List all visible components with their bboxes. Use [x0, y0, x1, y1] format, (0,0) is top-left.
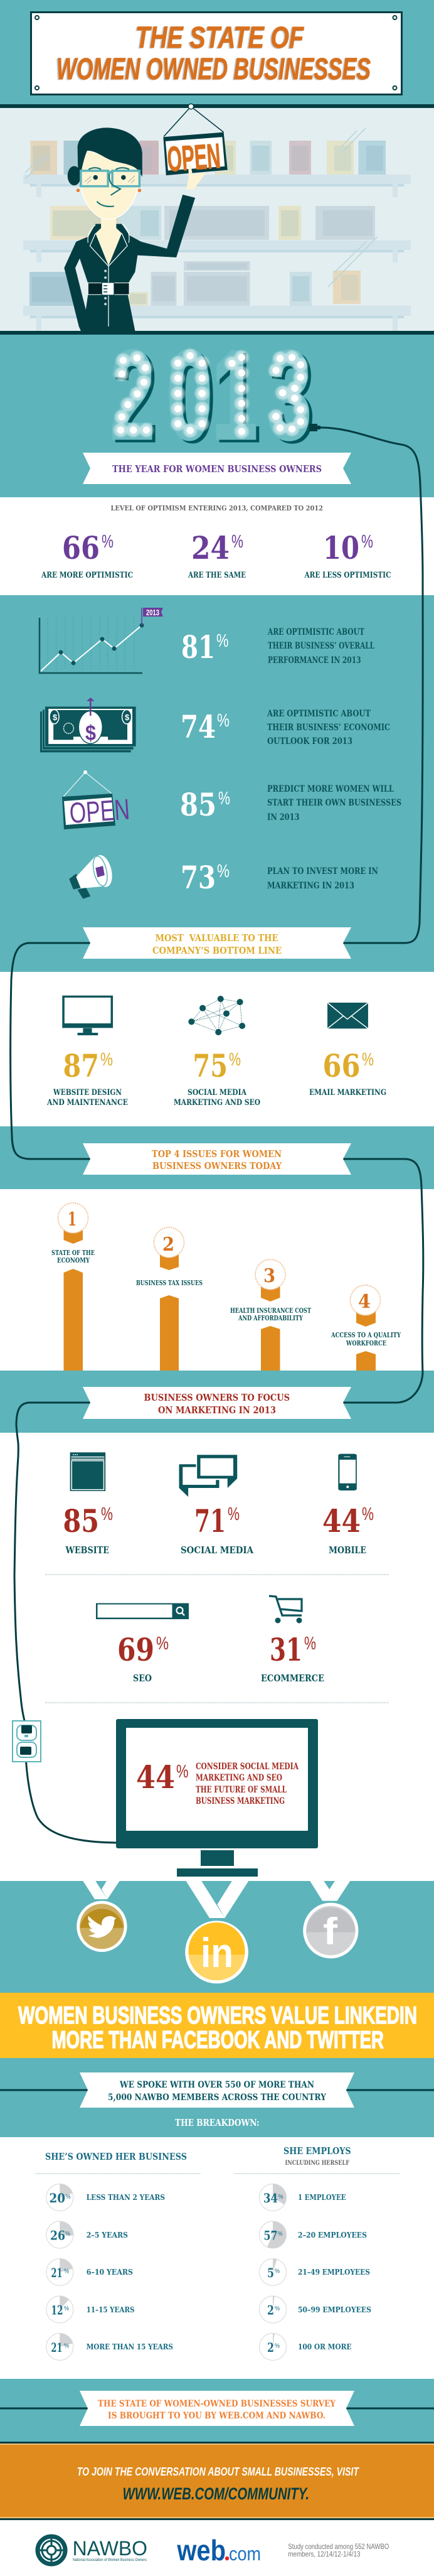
- stat: 74%: %: [217, 711, 230, 731]
- face: [80, 151, 138, 219]
- row: 21%: [46, 2333, 173, 2361]
- ribbon: top 4 issues: [83, 1143, 351, 1175]
- panel: level of optimism: %: [231, 532, 243, 552]
- panel: marketing stats row one: 44: [322, 1502, 361, 1539]
- panel: marketing stats row two: %: [304, 1634, 316, 1654]
- panel: level of optimism: ARE MORE OPTIMISTIC: [41, 571, 133, 580]
- belt: [88, 283, 129, 294]
- top issue 2: [136, 1227, 203, 1371]
- digit faces: 1: [212, 325, 257, 465]
- outlet with plugs: [13, 1721, 41, 1762]
- stat: 73%: 73: [181, 859, 216, 896]
- panel: marketing stats row one: SOCIAL MEDIA: [181, 1544, 253, 1556]
- stat: 74%: THEIR BUSINESS’ ECONOMIC: [267, 723, 390, 733]
- panel: marketing stats row one: WEBSITE: [65, 1544, 109, 1556]
- digit shadows: 0: [170, 327, 215, 468]
- icon: line chart with 2013 flag: 2013: [146, 608, 159, 617]
- stat: 85%: START THEIR OWN BUSINESSES: [267, 798, 401, 808]
- stat: 73%: %: [217, 861, 230, 881]
- panel: marketing stats row one: 85: [63, 1502, 99, 1539]
- ribbon: survey: [80, 2072, 354, 2108]
- logo: NAWBO: National Association of Women Business Owners: [73, 2558, 147, 2562]
- row: 5%: 5: [267, 2265, 274, 2280]
- panel: marketing stats row one: %: [362, 1504, 374, 1524]
- ribbon: sponsors: IS BROUGHT TO YOU BY WEB.COM AND NAWBO.: [108, 2411, 326, 2421]
- row: 34%: [260, 2184, 346, 2211]
- ribbon: the year for women business owners: THE YEAR FOR WOMEN BUSINESS OWNERS: [112, 463, 322, 475]
- icon: browser window: [70, 1452, 105, 1491]
- icon: social network: [191, 999, 242, 1032]
- large monitor callout: THE FUTURE OF SMALL: [196, 1785, 287, 1795]
- top issue 4: 4: [358, 1291, 371, 1313]
- ribbon: top 4 issues: BUSINESS OWNERS TODAY: [152, 1161, 282, 1172]
- row: 26%: %: [65, 2231, 70, 2238]
- icon: envelope: [327, 1003, 368, 1028]
- row: 21%: 6–10 YEARS: [87, 2268, 133, 2277]
- digit shadows: [114, 327, 314, 468]
- row: 2%: 2: [267, 2303, 274, 2318]
- row: 21%: [46, 2259, 133, 2285]
- panel: level of optimism: 24: [191, 529, 230, 566]
- panel: level of optimism: LEVEL OF OPTIMISM ENTERING 2013, COMPARED TO 2012: [110, 504, 323, 512]
- row: 57%: 2–20 EMPLOYEES: [298, 2231, 367, 2239]
- large monitor callout: MARKETING AND SEO: [196, 1773, 282, 1783]
- power cord: [0, 428, 434, 2408]
- ribbon: the year for women business owners: [83, 453, 351, 484]
- stat: 81%: THEIR BUSINESS’ OVERALL: [268, 641, 374, 651]
- panel: most valuable stats: EMAIL MARKETING: [309, 1088, 386, 1097]
- panel: level of optimism: ARE THE SAME: [188, 571, 246, 580]
- money symbols: $: [53, 713, 58, 722]
- row: 57%: [260, 2221, 367, 2248]
- row: 2%: %: [275, 2343, 280, 2349]
- top issue 2: BUSINESS TAX ISSUES: [136, 1279, 203, 1287]
- panel: marketing stats row two: SEO: [133, 1673, 152, 1684]
- top issue 1: STATE OF THE: [51, 1249, 95, 1257]
- ribbon: marketing focus: [83, 1387, 351, 1419]
- cord plug: [309, 424, 320, 431]
- large monitor callout: %: [176, 1762, 188, 1782]
- stat: 81%: [181, 627, 374, 666]
- icon: open sign: OPEN: [68, 792, 130, 829]
- panel: level of optimism: 10: [323, 529, 359, 566]
- icon: desktop monitor: [62, 996, 113, 1035]
- panel: marketing stats row one: MOBILE: [329, 1544, 366, 1556]
- row: 57%: %: [277, 2231, 283, 2238]
- top issue 4: WORKFORCE: [346, 1339, 386, 1347]
- row: 26%: 2–5 YEARS: [87, 2231, 128, 2239]
- stat: 81%: 81: [181, 628, 215, 666]
- sign strings and hook: [164, 107, 224, 136]
- digit faces: 0: [167, 325, 212, 465]
- heading: the breakdown: THE BREAKDOWN:: [175, 2117, 260, 2128]
- row: 2%: [260, 2296, 371, 2323]
- panel: most valuable stats: 66: [322, 1047, 360, 1084]
- stat: 85%: 85: [180, 786, 216, 823]
- shop shelves and products: [23, 128, 411, 331]
- glasses: [81, 168, 139, 207]
- top issue 3: 3: [263, 1265, 275, 1287]
- medal: facebook: f: [323, 1910, 338, 1953]
- large monitor callout: BUSINESS MARKETING: [196, 1796, 285, 1806]
- large monitor callout: [116, 1719, 318, 1877]
- stat: 73%: PLAN TO INVEST MORE IN: [267, 866, 378, 876]
- stat: 81%: ARE OPTIMISTIC ABOUT: [267, 627, 364, 637]
- earrings: [78, 189, 139, 192]
- panel: level of optimism: %: [361, 532, 373, 552]
- large monitor callout: CONSIDER SOCIAL MEDIA: [196, 1762, 299, 1772]
- panel: marketing stats row one: %: [101, 1504, 113, 1524]
- icon: shopping cart: [269, 1596, 302, 1624]
- panel: most valuable stats: SOCIAL MEDIA: [188, 1088, 247, 1097]
- stat: 73%: [181, 859, 378, 896]
- top issue 2: 2: [162, 1234, 174, 1256]
- digit shadows: 2: [114, 328, 157, 468]
- medal: facebook: [303, 1881, 358, 1958]
- open sign lettering: OPEN: [166, 136, 222, 179]
- title sign: THE STATE OF: [135, 21, 304, 55]
- money symbols: $: [85, 721, 96, 745]
- title sign: [31, 13, 401, 94]
- panel: level of optimism: [41, 504, 391, 580]
- stat: 73%: MARKETING IN 2013: [267, 881, 354, 891]
- top issue 1: [51, 1203, 95, 1371]
- digit faces: [110, 325, 311, 465]
- study note: members, 12/14/12-1/4/13: [288, 2550, 361, 2558]
- panel: call to action: [0, 2442, 434, 2520]
- panel: most valuable stats: WEBSITE DESIGN: [53, 1088, 122, 1097]
- icon: smartphone: [338, 1454, 357, 1490]
- panel: marketing stats row two: %: [156, 1634, 169, 1654]
- icon: money stack with arrow: [40, 698, 136, 752]
- row: 12%: 12: [51, 2303, 63, 2318]
- column: employees: SHE EMPLOYS: [283, 2145, 351, 2157]
- top issue 3: AND AFFORDABILITY: [238, 1314, 303, 1322]
- panel: marketing stats row one: %: [228, 1504, 240, 1524]
- row: 34%: 1 EMPLOYEE: [298, 2193, 346, 2202]
- row: 12%: %: [64, 2305, 69, 2312]
- ribbon: most valuable: COMPANY’S BOTTOM LINE: [152, 946, 282, 956]
- row: 2%: [260, 2333, 351, 2361]
- study note: [288, 2542, 389, 2558]
- stat: 85%: PREDICT MORE WOMEN WILL: [267, 784, 394, 794]
- top issue 1: ECONOMY: [57, 1256, 90, 1264]
- stat: 85%: [180, 784, 401, 823]
- dark ledge bands: [0, 104, 434, 335]
- top issue 4: [331, 1285, 401, 1371]
- hair: [78, 127, 142, 177]
- ribbon: sponsors: [80, 2391, 354, 2426]
- ribbon: most valuable: MOST VALUABLE TO THE: [156, 933, 278, 944]
- hair bun: [68, 166, 81, 185]
- column: employees: INCLUDING HERSELF: [285, 2160, 349, 2167]
- digit faces: 2: [110, 326, 154, 465]
- stat: 74%: 74: [181, 708, 216, 745]
- ribbon: sponsors: THE STATE OF WOMEN-OWNED BUSINESSES SURVEY: [98, 2399, 336, 2409]
- digit shadows: 1: [215, 327, 260, 468]
- stat: 85%: IN 2013: [267, 812, 300, 822]
- large monitor callout: 44: [136, 1759, 175, 1796]
- panel: most valuable stats: %: [100, 1050, 113, 1070]
- row: 12%: 11–15 YEARS: [87, 2305, 134, 2314]
- top issue 4: ACCESS TO A QUALITY: [331, 1331, 401, 1339]
- panel: most valuable stats: %: [229, 1050, 241, 1070]
- top issue 3: [230, 1259, 312, 1371]
- money symbols: [53, 713, 130, 745]
- icon: open sign: [62, 770, 130, 829]
- top issue 3: HEALTH INSURANCE COST: [230, 1307, 312, 1315]
- panel: call to action: WWW.WEB.COM/COMMUNITY.: [123, 2484, 309, 2503]
- panel: most valuable stats: AND MAINTENANCE: [46, 1098, 128, 1107]
- panel: call to action: TO JOIN THE CONVERSATION ABOUT SMALL BUSINESSES, VISIT: [77, 2466, 360, 2478]
- column: years owned: SHE’S OWNED HER BUSINESS: [45, 2151, 187, 2162]
- stat: 85%: %: [218, 789, 230, 809]
- medal: linkedin: in: [201, 1929, 233, 1976]
- panel: marketing stats row one: [63, 1502, 374, 1556]
- ribbon: marketing focus: ON MARKETING IN 2013: [158, 1405, 276, 1416]
- panel: level of optimism: 66: [62, 529, 100, 566]
- logo: NAWBO: NAWBO: [73, 2537, 147, 2560]
- row: 2%: 50–99 EMPLOYEES: [298, 2305, 371, 2314]
- row: 2%: %: [275, 2305, 280, 2312]
- row: 20%: [46, 2184, 165, 2211]
- panel: marketing stats row two: [117, 1631, 324, 1684]
- 2013 marquee: [110, 325, 314, 468]
- panel: marketing stats row two: ECOMMERCE: [261, 1673, 324, 1684]
- panel: most valuable stats: 87: [63, 1047, 99, 1084]
- medal: linkedin: [185, 1881, 248, 1983]
- ribbon: survey: WE SPOKE WITH OVER 550 OF MORE THAN: [119, 2080, 314, 2090]
- hand: [186, 164, 206, 190]
- top issue 1: 1: [68, 1209, 77, 1231]
- illustration: woman hanging open sign: [64, 107, 228, 331]
- headline: linkedin: [18, 2002, 417, 2054]
- row: 5%: [260, 2259, 370, 2285]
- icon: line chart with 2013 flag: [40, 608, 163, 673]
- bulbs: [120, 356, 300, 431]
- open sign: [163, 132, 228, 175]
- logo: NAWBO: [38, 2536, 147, 2564]
- jacket: [64, 195, 195, 331]
- logo: web.com: com: [229, 2543, 261, 2565]
- panel: marketing stats row two: 31: [270, 1631, 302, 1668]
- money symbols: $: [125, 713, 130, 722]
- row: 34%: 34: [263, 2191, 278, 2206]
- row: 12%: [46, 2296, 134, 2323]
- stat: 74%: ARE OPTIMISTIC ABOUT: [267, 709, 371, 719]
- column: years owned: [36, 2151, 201, 2361]
- row: 5%: %: [275, 2268, 280, 2275]
- row: 2%: 100 OR MORE: [298, 2342, 351, 2351]
- icon: chat bubbles: [179, 1455, 237, 1497]
- panel: level of optimism: ARE LESS OPTIMISTIC: [304, 571, 391, 580]
- panel: most valuable stats: %: [362, 1050, 374, 1070]
- ribbon: marketing focus: BUSINESS OWNERS TO FOCUS: [144, 1393, 290, 1403]
- panel: marketing stats row one: 71: [194, 1502, 226, 1539]
- logo: web.com: web: [177, 2534, 226, 2567]
- panel: level of optimism: %: [102, 532, 114, 552]
- icon: megaphone: [69, 854, 115, 899]
- row: 34%: %: [278, 2194, 283, 2201]
- row: 57%: 57: [263, 2228, 277, 2243]
- digit faces: 3: [267, 326, 311, 465]
- row: 26%: 26: [50, 2228, 65, 2243]
- row: 20%: LESS THAN 2 YEARS: [87, 2193, 165, 2202]
- row: 21%: MORE THAN 15 YEARS: [87, 2342, 173, 2351]
- ribbon: most valuable: [83, 927, 351, 959]
- row: 21%: %: [64, 2268, 69, 2275]
- icon: search bar: [96, 1603, 189, 1619]
- row: 20%: 20: [49, 2191, 65, 2206]
- stat: 81%: PERFORMANCE IN 2013: [268, 655, 361, 666]
- title sign: THE STATE OF: [134, 22, 303, 55]
- medal: twitter: [77, 1881, 127, 1952]
- stat: 74%: [181, 708, 390, 746]
- logo: web.com: [177, 2534, 261, 2567]
- panel: marketing stats row two: 69: [117, 1631, 154, 1668]
- row: 26%: [46, 2221, 128, 2248]
- row: 20%: %: [66, 2194, 71, 2201]
- ribbon: survey: 5,000 NAWBO MEMBERS ACROSS THE COUNTRY: [108, 2093, 327, 2103]
- panel: most valuable stats: 75: [193, 1047, 228, 1084]
- column: employees: [235, 2145, 400, 2361]
- digit shadows: 3: [270, 328, 314, 468]
- stat: 74%: OUTLOOK FOR 2013: [267, 736, 352, 746]
- stat: 81%: %: [216, 631, 228, 651]
- panel: most valuable stats: MARKETING AND SEO: [174, 1098, 260, 1107]
- ribbon: top 4 issues: TOP 4 ISSUES FOR WOMEN: [152, 1149, 282, 1160]
- panel: most valuable stats: [46, 1047, 386, 1107]
- row: 21%: 21: [51, 2265, 63, 2280]
- row: 2%: 2: [267, 2340, 274, 2355]
- row: 21%: 21: [51, 2340, 63, 2355]
- row: 5%: 21–49 EMPLOYEES: [298, 2268, 370, 2277]
- row: 21%: %: [64, 2343, 69, 2349]
- study note: Study conducted among 552 NAWBO: [288, 2542, 389, 2551]
